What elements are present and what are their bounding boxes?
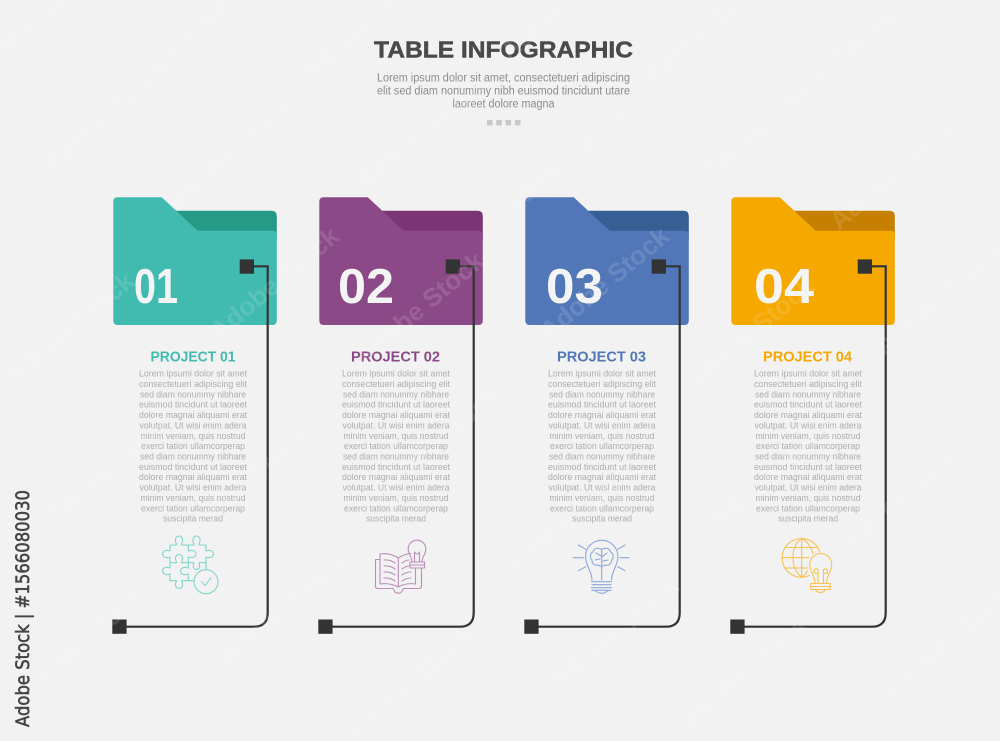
title: TABLE INFOGRAPHIC <box>374 37 633 63</box>
body text 03: minim veniam, quis nostrud <box>550 493 654 503</box>
body text 01: consectetueri adipiscing elit <box>139 379 247 389</box>
body text 02: dolore magnai aliquami erat <box>342 410 450 420</box>
body text 03 <box>548 369 656 524</box>
icon: globe with light bulb <box>782 538 832 592</box>
body text 02: euismod tincidunt ut laoreet <box>342 400 450 410</box>
body text 03: exerci tation ullamcorperap <box>550 441 654 451</box>
body text 01: Lorem ipsumi dolor sit amet <box>139 369 247 379</box>
connector line 02 <box>332 266 474 627</box>
body text 04 <box>754 369 862 524</box>
body text 02: suscipita merad <box>366 514 426 524</box>
connector start node 03 <box>652 259 666 274</box>
body text 01: volutpat. Ut wisi enim adera <box>140 420 247 430</box>
body text 01: dolore magnai aliquami erat <box>139 410 247 420</box>
body text 04: volutpat. Ut wisi enim adera <box>754 420 862 430</box>
body text 02: exerci tation ullamcorperap <box>344 503 448 513</box>
connector line 03 <box>538 266 680 627</box>
body text 03: euismod tincidunt ut laoreet <box>548 400 656 410</box>
heading: project 01: PROJECT 01 <box>150 350 236 366</box>
body text 02: volutpat. Ut wisi enim adera <box>342 483 450 493</box>
connector line 04 <box>744 266 886 627</box>
connector start node 04 <box>858 259 872 274</box>
body text 03: exerci tation ullamcorperap <box>550 503 654 513</box>
folder 02 <box>319 197 483 325</box>
body text 03: sed diam nonummy nibhare <box>549 389 655 399</box>
body text 03: suscipita merad <box>572 514 632 524</box>
watermark: Adobe Stock <box>39 405 180 531</box>
title divider dots <box>487 120 520 126</box>
body text 04: volutpat. Ut wisi enim adera <box>754 483 862 493</box>
body text 04: sed diam nonummy nibhare <box>755 389 861 399</box>
connector line 01 <box>126 266 268 627</box>
body text 04: exerci tation ullamcorperap <box>756 503 860 513</box>
heading: project 04: PROJECT 04 <box>763 350 853 366</box>
watermark: Adobe Stock <box>704 410 845 536</box>
body text 03: volutpat. Ut wisi enim adera <box>548 483 656 493</box>
number 03: 03 <box>546 260 603 314</box>
icon: light bulb with brain <box>573 540 629 593</box>
subtitle: elit sed diam nonumimy nibh euismod tincidunt utare <box>377 86 630 98</box>
watermark: Adobe Stock <box>696 60 837 186</box>
body text 01 <box>139 369 247 524</box>
watermark: Adobe Stock <box>9 580 150 706</box>
body text 01: volutpat. Ut wisi enim adera <box>140 483 247 493</box>
body text 01: euismod tincidunt ut laoreet <box>139 462 247 472</box>
connector end node 02 <box>318 620 333 634</box>
body text 01: sed diam nonummy nibhare <box>140 452 246 462</box>
body text 04: exerci tation ullamcorperap <box>756 441 860 451</box>
subtitle: laoreet dolore magna <box>452 98 555 110</box>
folder 04 <box>731 197 895 325</box>
body text 03: minim veniam, quis nostrud <box>550 431 654 441</box>
heading: project 02: PROJECT 02 <box>351 350 440 366</box>
body text 04: consectetueri adipiscing elit <box>754 379 862 389</box>
body text 02: minim veniam, quis nostrud <box>344 431 448 441</box>
watermark: Adobe Stock <box>824 110 965 236</box>
watermark: Adobe Stock <box>162 90 303 216</box>
icon: puzzle with check <box>162 536 218 594</box>
watermark: Adobe Stock <box>349 245 490 371</box>
body text 02: consectetueri adipiscing elit <box>342 379 450 389</box>
watermark: Adobe Stock <box>214 545 355 671</box>
body text 04: Lorem ipsumi dolor sit amet <box>754 369 862 379</box>
side credit text: Adobe Stock | #1566080030 <box>12 490 34 727</box>
body text 03: volutpat. Ut wisi enim adera <box>548 420 656 430</box>
subtitle <box>377 72 630 110</box>
panel: project 04 <box>730 197 895 634</box>
watermark: Adobe Stock <box>174 420 315 546</box>
body text 01: exerci tation ullamcorperap <box>141 441 245 451</box>
folder 01 <box>113 197 277 325</box>
number 01: 01 <box>134 260 178 314</box>
number 02: 02 <box>338 260 394 314</box>
subtitle: Lorem ipsum dolor sit amet, consectetueri adipiscing <box>377 72 630 84</box>
watermark: Adobe Stock <box>499 455 640 581</box>
body text 03: Lorem ipsumi dolor sit amet <box>548 369 656 379</box>
body text 01: minim veniam, quis nostrud <box>140 431 246 441</box>
body text 01: exerci tation ullamcorperap <box>141 503 245 513</box>
body text 04: minim veniam, quis nostrud <box>756 493 860 503</box>
body text 03: euismod tincidunt ut laoreet <box>548 462 656 472</box>
body text 01: sed diam nonummy nibhare <box>140 389 246 399</box>
body text 01: minim veniam, quis nostrud <box>140 493 246 503</box>
body text 01: dolore magnai aliquami erat <box>139 472 247 482</box>
watermark: Adobe Stock <box>534 220 675 346</box>
connector start node 01 <box>240 259 254 274</box>
folder 03 <box>525 197 689 325</box>
body text 02: dolore magnai aliquami erat <box>342 472 450 482</box>
body text 01: suscipita merad <box>163 514 223 524</box>
body text 01: euismod tincidunt ut laoreet <box>139 400 247 410</box>
watermark: Adobe Stock <box>0 265 140 391</box>
connector start node 02 <box>446 259 460 274</box>
number 04: 04 <box>754 260 814 314</box>
watermark: Adobe Stock <box>679 270 820 396</box>
body text 04: dolore magnai aliquami erat <box>754 472 862 482</box>
icon: open book with light bulb <box>376 540 426 593</box>
body text 02 <box>342 369 450 524</box>
body text 02: minim veniam, quis nostrud <box>344 493 448 503</box>
panel: project 02 <box>318 197 483 634</box>
body text 02: exerci tation ullamcorperap <box>344 441 448 451</box>
heading: project 03: PROJECT 03 <box>557 350 646 366</box>
body text 02: Lorem ipsumi dolor sit amet <box>342 369 450 379</box>
body text 02: sed diam nonummy nibhare <box>343 389 449 399</box>
watermark: Adobe Stock <box>496 95 637 221</box>
body text 03: dolore magnai aliquami erat <box>548 472 656 482</box>
body text 03: dolore magnai aliquami erat <box>548 410 656 420</box>
watermark: Adobe Stock <box>674 610 815 736</box>
watermark: Adobe Stock <box>834 430 975 556</box>
body text 04: euismod tincidunt ut laoreet <box>754 462 862 472</box>
body text 04: minim veniam, quis nostrud <box>756 431 860 441</box>
panel: project 03 <box>524 197 689 634</box>
connector end node 01 <box>112 620 127 634</box>
body text 02: sed diam nonummy nibhare <box>343 452 449 462</box>
watermark: Adobe Stock <box>36 52 177 178</box>
connector end node 03 <box>524 620 539 634</box>
body text 04: dolore magnai aliquami erat <box>754 410 862 420</box>
watermark: Adobe Stock <box>544 570 685 696</box>
connector end node 04 <box>730 620 745 634</box>
watermark: Adobe Stock <box>364 380 505 506</box>
body text 04: suscipita merad <box>778 514 838 524</box>
body text 02: volutpat. Ut wisi enim adera <box>342 420 450 430</box>
body text 04: euismod tincidunt ut laoreet <box>754 400 862 410</box>
watermark: Adobe Stock <box>204 220 345 346</box>
watermark: Adobe Stock <box>349 70 490 196</box>
body text 02: euismod tincidunt ut laoreet <box>342 462 450 472</box>
body text 03: consectetueri adipiscing elit <box>548 379 656 389</box>
body text 03: sed diam nonummy nibhare <box>549 452 655 462</box>
panel: project 01 <box>112 197 277 634</box>
body text 04: sed diam nonummy nibhare <box>755 452 861 462</box>
